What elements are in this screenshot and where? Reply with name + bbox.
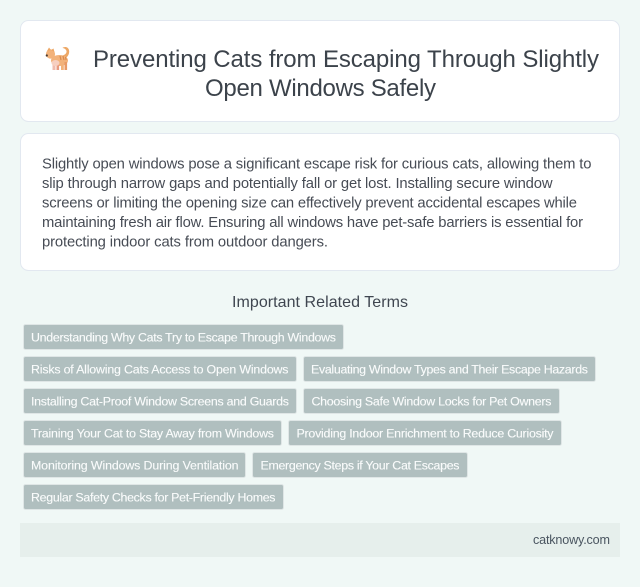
tag 5 — [304, 388, 560, 414]
summary paragraph — [42, 156, 592, 250]
tag 9 — [252, 452, 468, 478]
heading: important related terms: Important Related Terms — [232, 294, 408, 311]
tag 2: Risks of Allowing Cats Access to Open Windows — [31, 362, 288, 376]
summary paragraph: Slightly open windows pose a significant escape risk for curious cats, allowing them to — [42, 156, 592, 172]
tag 8: Monitoring Windows During Ventilation — [31, 458, 239, 472]
tag 7 — [288, 420, 562, 446]
tag 8 — [24, 452, 246, 478]
tag 1 — [24, 324, 344, 350]
title: Open Windows Safely — [205, 75, 436, 102]
summary paragraph: screens or limiting the opening size can effectively prevent accidental escapes while — [42, 195, 577, 211]
tag 3: Evaluating Window Types and Their Escape Hazards — [311, 362, 588, 376]
panel: summary text — [20, 134, 620, 270]
tag 6 — [24, 420, 282, 446]
tag list — [24, 324, 596, 510]
summary paragraph: slip through narrow gaps and potentially fall or get lost. Installing secure window — [42, 176, 553, 192]
tag 5: Choosing Safe Window Locks for Pet Owners — [312, 394, 552, 408]
tag 7: Providing Indoor Enrichment to Reduce Curiosity — [296, 426, 554, 440]
title: Preventing Cats from Escaping Through Slightly — [93, 46, 599, 73]
title — [93, 46, 599, 102]
tag 4: Installing Cat-Proof Window Screens and Guards — [31, 394, 289, 408]
tag 3 — [304, 356, 596, 382]
icon: cat — [46, 47, 69, 70]
tag 1: Understanding Why Cats Try to Escape Through Windows — [31, 330, 336, 344]
tag 10: Regular Safety Checks for Pet-Friendly Homes — [31, 490, 276, 504]
tag 4 — [24, 388, 296, 414]
panel: header — [20, 20, 620, 122]
tag 6: Training Your Cat to Stay Away from Windows — [31, 426, 274, 440]
tag 9: Emergency Steps if Your Cat Escapes — [260, 458, 460, 472]
tag 2 — [24, 356, 296, 382]
summary paragraph: maintaining fresh air flow. Ensuring all windows have pet-safe barriers is essential for — [42, 215, 583, 231]
summary paragraph: protecting indoor cats from outdoor dangers. — [42, 234, 328, 250]
footer — [20, 523, 620, 557]
footer: catknowy.com — [533, 533, 610, 547]
tag 10 — [24, 484, 284, 510]
